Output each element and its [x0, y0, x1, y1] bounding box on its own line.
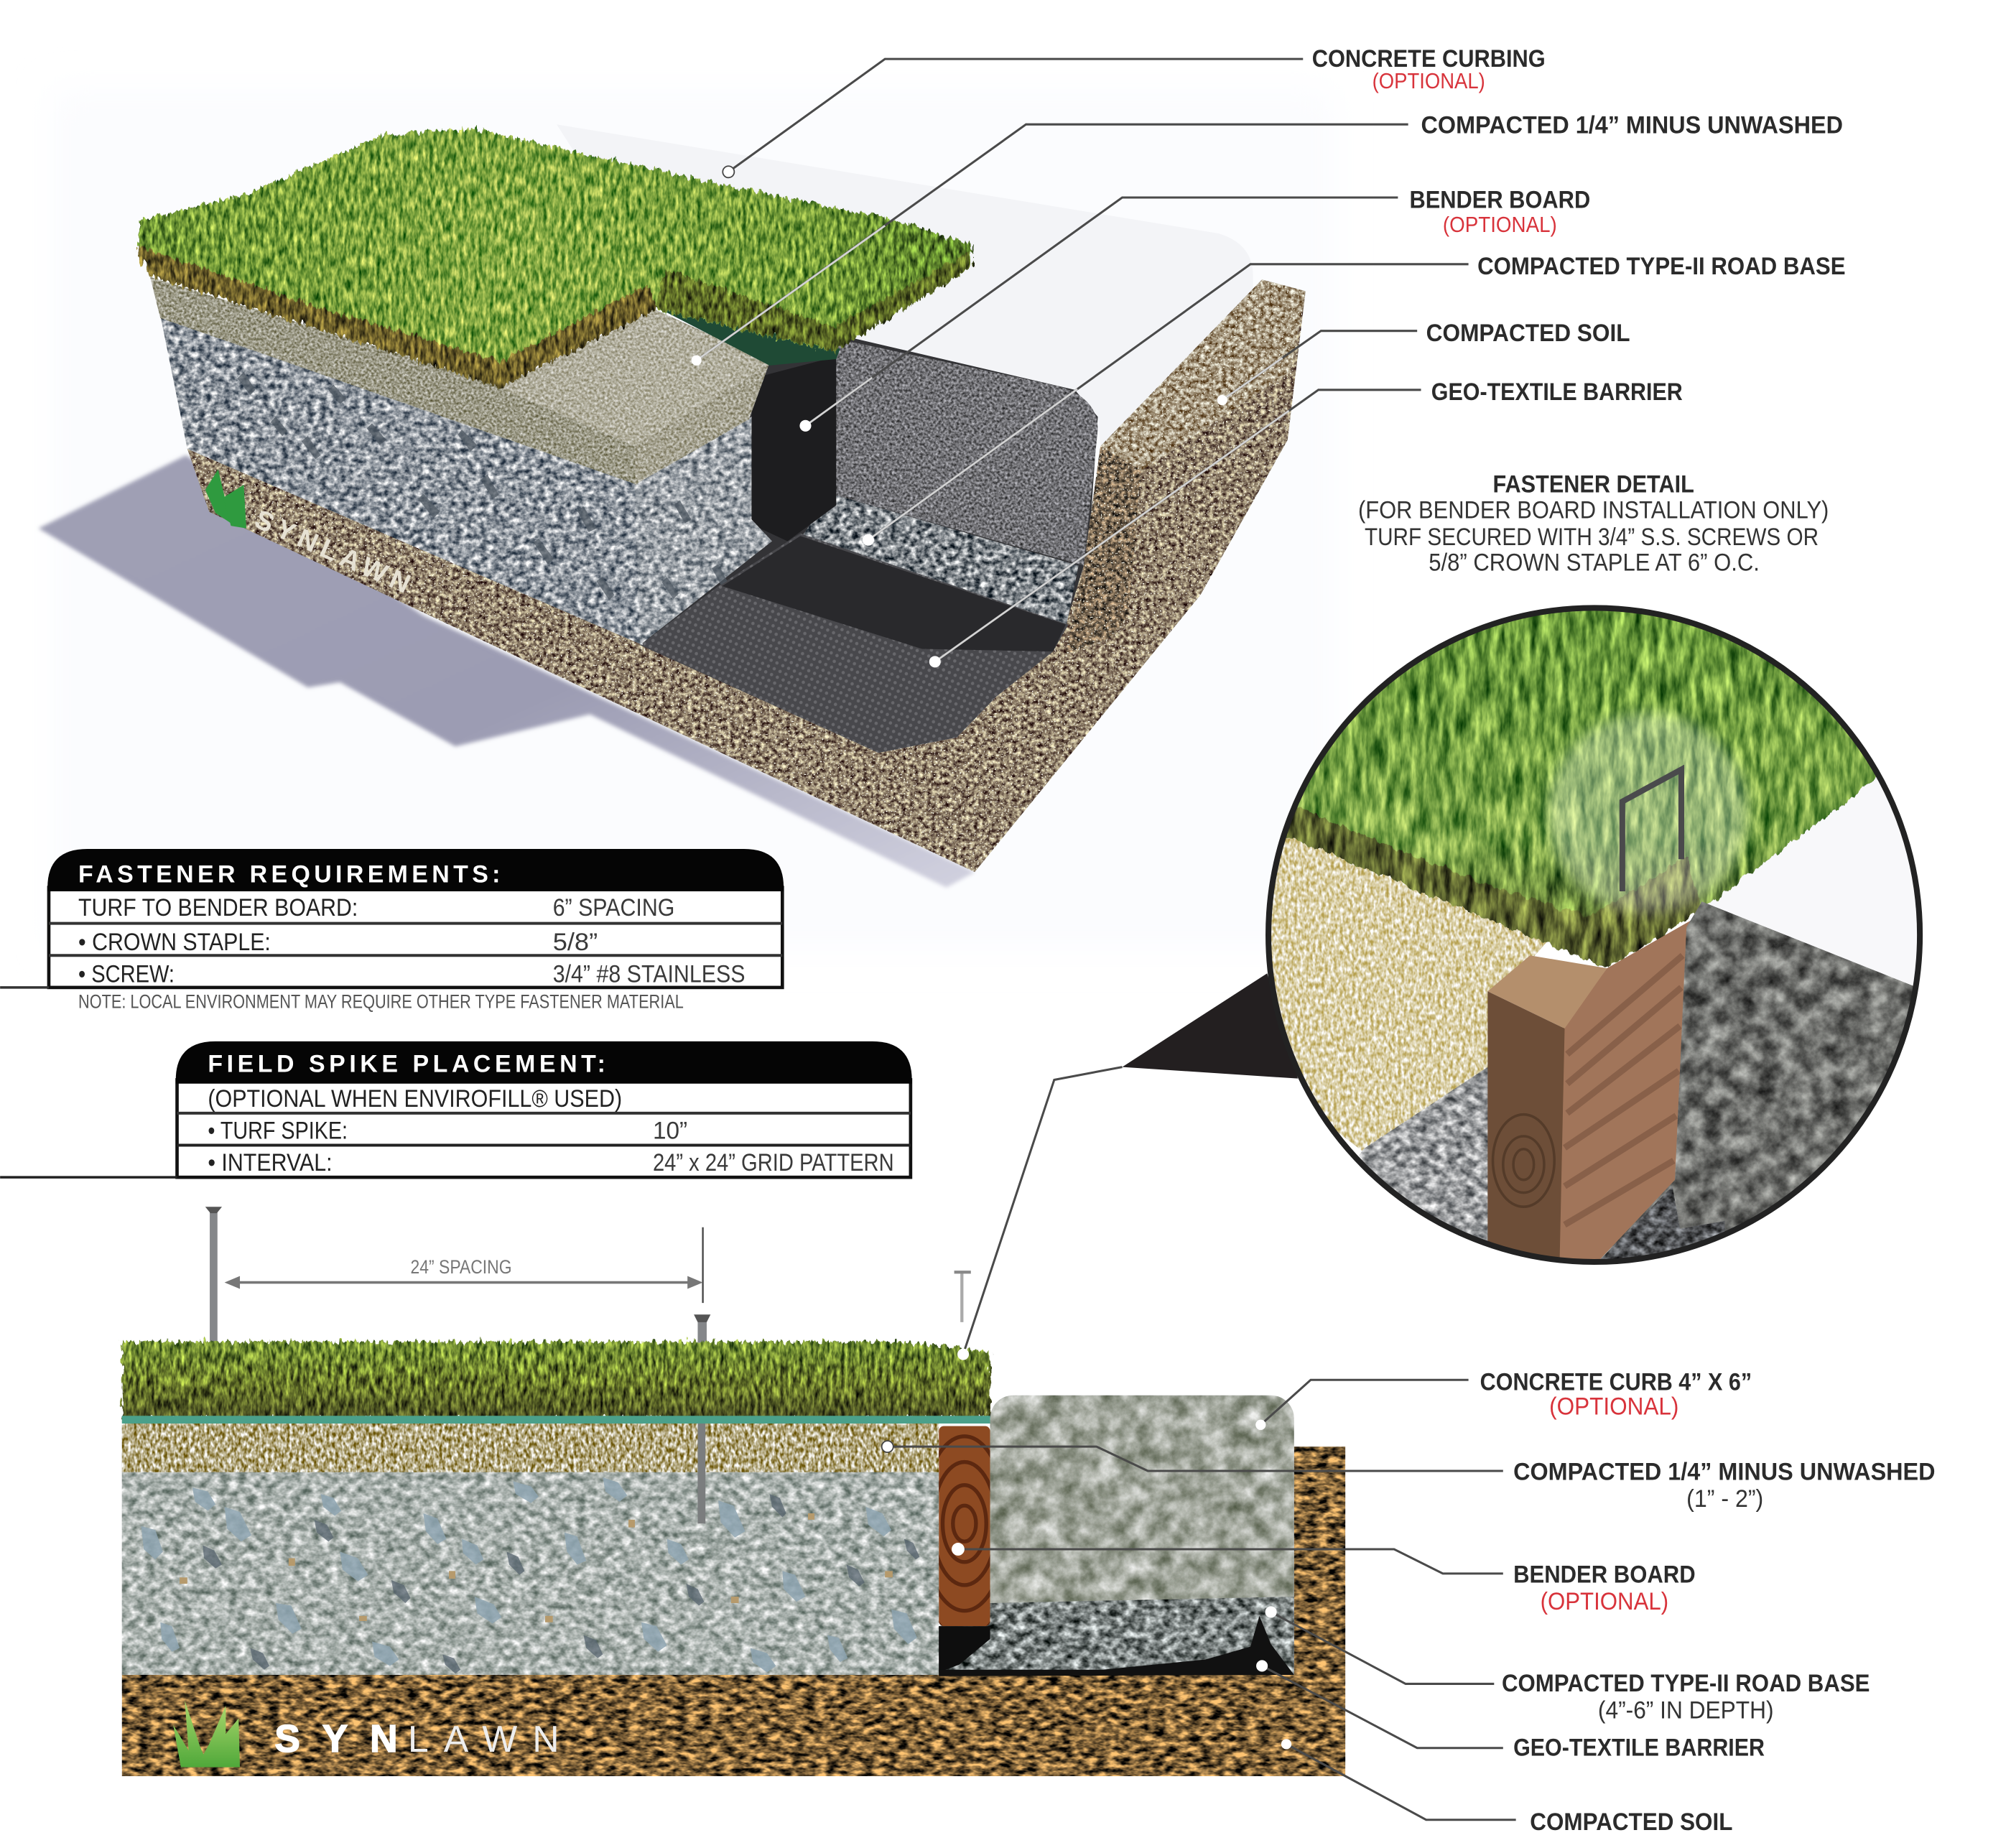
- callout pointer: [963, 973, 1298, 1355]
- top leader lines: [692, 59, 1469, 667]
- label: compacted minus: COMPACTED 1/4” MINUS UNWASHED: [1421, 112, 1843, 139]
- label: concrete curb: CONCRETE CURB 4” X 6”: [1480, 1369, 1752, 1396]
- table: field spike placement: • INTERVAL:: [208, 1149, 333, 1176]
- label: depth one to two: (1” - 2”): [1686, 1485, 1763, 1513]
- left spike: [205, 1207, 222, 1344]
- label: bender optional: (OPTIONAL): [1443, 213, 1557, 237]
- concrete curb side: [831, 338, 1098, 565]
- label: bender board: BENDER BOARD: [1409, 186, 1590, 213]
- top logo grass mark: [205, 470, 246, 529]
- SYNLAWN logo: [173, 1701, 559, 1768]
- lens: concrete curb: [1590, 901, 1923, 1270]
- icon: crown staple: [1622, 769, 1681, 891]
- soil wall top: [1100, 279, 1306, 470]
- table: field spike placement: • TURF SPIKE:: [208, 1118, 348, 1145]
- label: geo-textile: GEO-TEXTILE BARRIER: [1513, 1734, 1765, 1761]
- label: compacted soil: COMPACTED SOIL: [1530, 1808, 1732, 1836]
- table: field spike placement: FIELD SPIKE PLACEMENT:: [208, 1051, 605, 1078]
- table: fastener requirements: 5/8”: [553, 929, 598, 956]
- spacing dimension: 24” SPACING: [410, 1256, 512, 1278]
- sand right face: [635, 363, 769, 485]
- table: fastener requirements: 6” SPACING: [553, 894, 674, 921]
- label: optional: (OPTIONAL): [1373, 70, 1485, 93]
- gravel stones: [141, 1477, 919, 1673]
- fastener detail text: (FOR BENDER BOARD INSTALLATION ONLY): [1358, 496, 1829, 524]
- geo-textile strip: [939, 1616, 1294, 1676]
- label: concrete curbing: CONCRETE CURBING: [1312, 45, 1546, 73]
- compacted soil: [187, 279, 1306, 872]
- label: bender optional: (OPTIONAL): [1541, 1588, 1668, 1615]
- gravel left face: [160, 315, 643, 645]
- table: fastener requirements: FASTENER REQUIREMENTS:: [78, 860, 500, 888]
- label: road base depth: (4”-6” IN DEPTH): [1598, 1697, 1774, 1724]
- road base under curb: [939, 1597, 1294, 1675]
- lens: grass: [1286, 610, 1876, 967]
- concrete curbing top: [557, 124, 1253, 446]
- turf layer: [122, 1342, 990, 1418]
- detail lens: [1250, 603, 1936, 1270]
- lens: glow around staple: [1548, 713, 1748, 913]
- bottom labels: [1480, 1369, 1936, 1836]
- table: fastener requirements: • SCREW:: [78, 961, 175, 988]
- geo-textile barrier: [640, 534, 1068, 753]
- spike in ground: [697, 1424, 705, 1523]
- SYNLAWN logo: SYN: [274, 1718, 398, 1760]
- fastener detail text: TURF SECURED WITH 3/4” S.S. SCREWS OR: [1365, 524, 1819, 551]
- gravel layer: [122, 1472, 939, 1675]
- fastener detail text: FASTENER DETAIL: [1493, 471, 1694, 498]
- table: fastener requirements: [0, 849, 784, 988]
- sand layer: [122, 1421, 939, 1472]
- soil wall ridge: [1066, 446, 1141, 654]
- label: road base: COMPACTED TYPE-II ROAD BASE: [1502, 1670, 1870, 1697]
- dark trench backing: [635, 336, 1098, 753]
- staple icon: [955, 1272, 971, 1322]
- spacing dimension: [225, 1227, 703, 1303]
- lens: gravel beneath curb: [1590, 1187, 1725, 1270]
- table: field spike placement: 10”: [653, 1118, 687, 1145]
- label: road base: COMPACTED TYPE-II ROAD BASE: [1477, 253, 1846, 280]
- soil layer: [122, 1447, 1345, 1776]
- label: bender board: BENDER BOARD: [1513, 1561, 1696, 1588]
- top labels: [1312, 45, 1846, 406]
- gravel right face: [635, 417, 772, 645]
- label: compacted minus: COMPACTED 1/4” MINUS UNWASHED: [1513, 1459, 1936, 1486]
- lens: wood end grain: [1487, 991, 1565, 1267]
- slate shards on gravel face: [237, 372, 728, 600]
- icon: grass mark: [173, 1701, 240, 1768]
- table: field spike placement: 24” x 24” GRID PATTERN: [653, 1149, 894, 1176]
- fastener detail text: [1358, 471, 1829, 577]
- teal backing: [122, 1416, 990, 1424]
- cross section: [122, 1207, 1345, 1776]
- top SYNLAWN logo: SYNLAWN: [251, 503, 415, 599]
- cast shadow: [39, 455, 975, 888]
- lens: wood side: [1557, 921, 1690, 1267]
- lens ring: [1268, 608, 1920, 1262]
- lens: wood grain: [1565, 955, 1683, 1225]
- lens: sand: [1271, 837, 1547, 1151]
- grass turf: [139, 129, 972, 387]
- table: fastener requirements: • CROWN STAPLE:: [78, 929, 271, 956]
- lens: wood top: [1487, 955, 1607, 1029]
- 3D installation model: [39, 124, 1306, 888]
- table: field spike placement: [0, 1041, 912, 1177]
- bender board: [749, 356, 836, 542]
- green backing strip: [648, 302, 840, 366]
- fastener note: NOTE: LOCAL ENVIRONMENT MAY REQUIRE OTHER TYPE FASTENER MATERIAL: [78, 990, 684, 1012]
- label: geo-textile: GEO-TEXTILE BARRIER: [1431, 379, 1683, 406]
- lens: road base gravel: [1359, 1067, 1488, 1241]
- shadow below bender board: [939, 1626, 990, 1672]
- geo-textile shadowed area: [722, 536, 1066, 651]
- road base behind bender board: [800, 493, 1079, 628]
- label: compacted soil: COMPACTED SOIL: [1426, 320, 1630, 347]
- lens: concrete top: [1699, 769, 1936, 994]
- SYNLAWN logo: LAWN: [408, 1718, 559, 1760]
- curb: [990, 1396, 1294, 1626]
- table: fastener requirements: TURF TO BENDER BOARD:: [78, 894, 358, 921]
- bottom leader lines: [882, 1349, 1516, 1820]
- background panel: [52, 90, 1334, 949]
- sand top: [498, 309, 772, 446]
- sand left face: [150, 277, 638, 485]
- right spike above turf: [694, 1314, 710, 1344]
- fastener detail text: 5/8” CROWN STAPLE AT 6” O.C.: [1429, 549, 1760, 577]
- bender board end: [912, 1408, 1017, 1639]
- table: field spike placement: (OPTIONAL WHEN ENVIROFILL® USED): [208, 1085, 622, 1113]
- table: fastener requirements: 3/4” #8 STAINLESS: [553, 961, 746, 988]
- label: curb optional: (OPTIONAL): [1549, 1393, 1678, 1420]
